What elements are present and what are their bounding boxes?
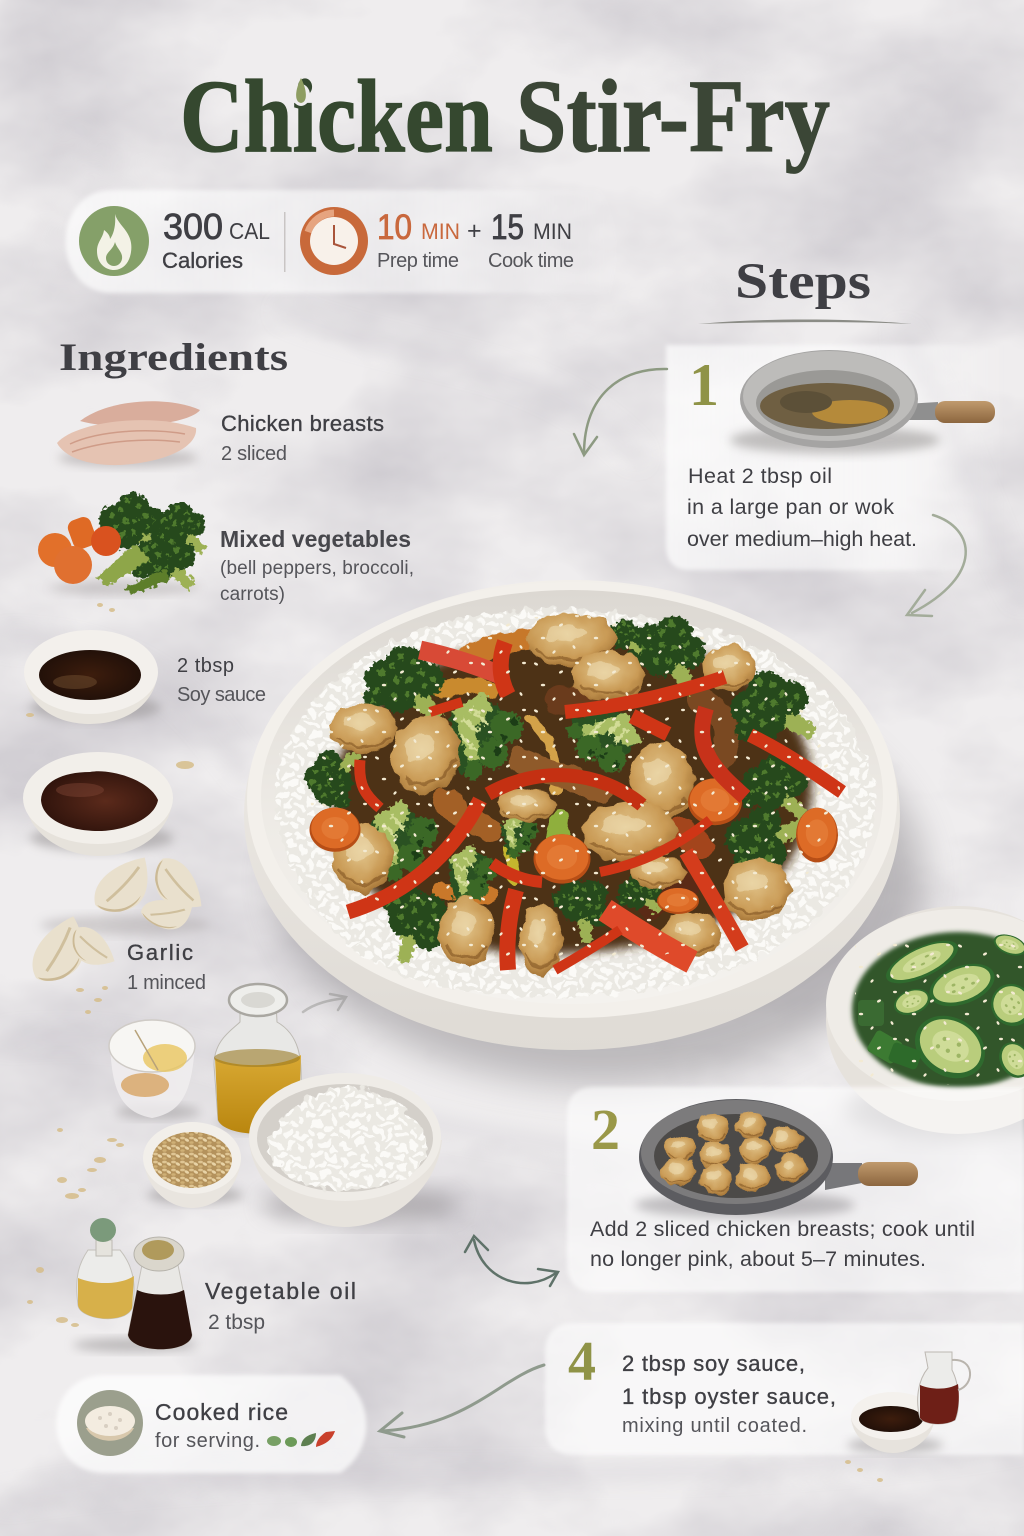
food: carrots bbox=[310, 778, 838, 914]
step 2 panel bbox=[567, 1087, 1024, 1292]
title: Stir-Fry bbox=[516, 59, 830, 174]
title bbox=[180, 59, 830, 174]
stats bar bbox=[66, 190, 618, 293]
arrow: step 1 to plate bbox=[574, 369, 667, 455]
soy sauce label: Soy sauce bbox=[177, 684, 266, 706]
step 1 text: in a large pan or wok bbox=[687, 495, 894, 519]
steps heading: Steps bbox=[735, 254, 871, 310]
ingredient: sesame bowl bbox=[143, 1122, 243, 1208]
step 2 text bbox=[590, 1217, 975, 1271]
food: broccoli bbox=[305, 607, 819, 968]
step 1 text: over medium–high heat. bbox=[687, 527, 917, 551]
ingredient: oil jar bbox=[214, 984, 307, 1134]
step 4 text: 2 tbsp soy sauce, bbox=[622, 1351, 805, 1376]
icon: garnish leaves and chili bbox=[267, 1431, 335, 1447]
side bowl: cucumber salad bbox=[826, 906, 1024, 1138]
step number 2: 2 bbox=[591, 1097, 620, 1162]
step 1 text: Heat 2 tbsp oil bbox=[688, 464, 832, 488]
step 1 text bbox=[687, 464, 917, 551]
oil cruet bbox=[77, 1218, 134, 1319]
ingredient: vegetable oil bottles bbox=[73, 1218, 197, 1352]
vegetable oil label: 2 tbsp bbox=[208, 1311, 265, 1334]
ingredient: oyster sauce bowl bbox=[23, 752, 174, 856]
arrow: faint garlic bbox=[303, 994, 346, 1012]
ingredient: soy sauce bowl bbox=[24, 630, 161, 724]
vegetable oil label: Vegetable oil bbox=[205, 1278, 356, 1304]
step 4 text bbox=[622, 1351, 836, 1437]
arrow: step 1 to dish bbox=[907, 515, 966, 616]
time stats bbox=[377, 208, 574, 272]
step 4 text: mixing until coated. bbox=[622, 1415, 807, 1437]
chicken breasts label: Chicken breasts bbox=[221, 411, 384, 436]
icon: rice dish bbox=[77, 1390, 143, 1456]
time stats: MIN bbox=[533, 219, 572, 244]
soy bottle bbox=[128, 1237, 192, 1349]
time stats: Cook time bbox=[488, 250, 574, 272]
ingredients heading: Ingredients bbox=[59, 336, 288, 379]
title: Chicken bbox=[180, 59, 493, 174]
plate body bbox=[244, 580, 900, 1050]
icon: sauce cup and pitcher bbox=[847, 1352, 970, 1453]
sesame seeds bbox=[310, 615, 840, 965]
garlic label: 1 minced bbox=[127, 972, 206, 994]
time stats: 10 bbox=[377, 208, 412, 247]
mixed vegetables label: Mixed vegetables bbox=[220, 526, 411, 552]
cooked rice pill bbox=[56, 1375, 366, 1473]
mixed vegetables label: carrots) bbox=[220, 584, 285, 605]
step 4 text: 1 tbsp oyster sauce, bbox=[622, 1384, 836, 1409]
icon: clock bbox=[300, 207, 368, 275]
scattered sesame seeds bbox=[26, 603, 883, 1482]
garlic label: Garlic bbox=[127, 940, 193, 965]
chicken breasts label: 2 sliced bbox=[221, 443, 287, 465]
food: chicken pieces bbox=[330, 613, 791, 977]
mixed vegetables label bbox=[220, 526, 414, 605]
arrow: double-headed to step 2 bbox=[465, 1236, 558, 1286]
step 2 text: Add 2 sliced chicken breasts; cook until bbox=[590, 1217, 975, 1241]
plate shadow bbox=[275, 675, 925, 1085]
time stats: MIN bbox=[421, 219, 460, 244]
chicken breasts label bbox=[221, 411, 384, 465]
ingredient: chicken breasts bbox=[57, 401, 200, 467]
icon: pan with oil bbox=[730, 350, 995, 454]
time stats: Prep time bbox=[377, 250, 459, 272]
icon: pan with chicken bbox=[635, 1099, 918, 1218]
step 4 panel bbox=[545, 1323, 1024, 1455]
calories stat bbox=[162, 206, 270, 273]
calories stat: CAL bbox=[229, 218, 270, 244]
ingredient: garlic cloves bbox=[22, 857, 210, 985]
food: onion and filler strips bbox=[440, 640, 727, 905]
step number 4: 4 bbox=[568, 1331, 596, 1393]
rice bed bbox=[275, 610, 875, 997]
main stir-fry plate bbox=[244, 580, 925, 1085]
steps heading bbox=[698, 254, 912, 324]
arrow: step 4 to rice bbox=[380, 1365, 544, 1437]
ingredient: small glass bbox=[109, 1020, 200, 1119]
food: red pepper strips bbox=[348, 642, 842, 970]
icon: flame bbox=[79, 206, 149, 276]
time stats: 15 bbox=[491, 208, 524, 247]
calories stat: Calories bbox=[162, 248, 243, 273]
vegetable oil label bbox=[205, 1278, 356, 1334]
garlic label bbox=[127, 940, 206, 994]
cooked rice text bbox=[155, 1399, 288, 1452]
soy sauce label bbox=[177, 655, 266, 706]
step 2 text: no longer pink, about 5–7 minutes. bbox=[590, 1247, 926, 1271]
step number 1: 1 bbox=[689, 352, 719, 418]
sauce base bbox=[335, 633, 812, 955]
soy sauce label: 2 tbsp bbox=[177, 655, 234, 677]
time stats: + bbox=[467, 217, 482, 245]
cooked rice text: Cooked rice bbox=[155, 1399, 288, 1425]
step 1 panel bbox=[666, 345, 1000, 570]
calories stat: 300 bbox=[163, 206, 223, 247]
ingredient: cooked rice bowl bbox=[249, 1073, 458, 1227]
cooked rice text: for serving. bbox=[155, 1430, 260, 1452]
ingredient: mixed vegetables bbox=[38, 493, 206, 595]
mixed vegetables label: (bell peppers, broccoli, bbox=[220, 558, 414, 579]
